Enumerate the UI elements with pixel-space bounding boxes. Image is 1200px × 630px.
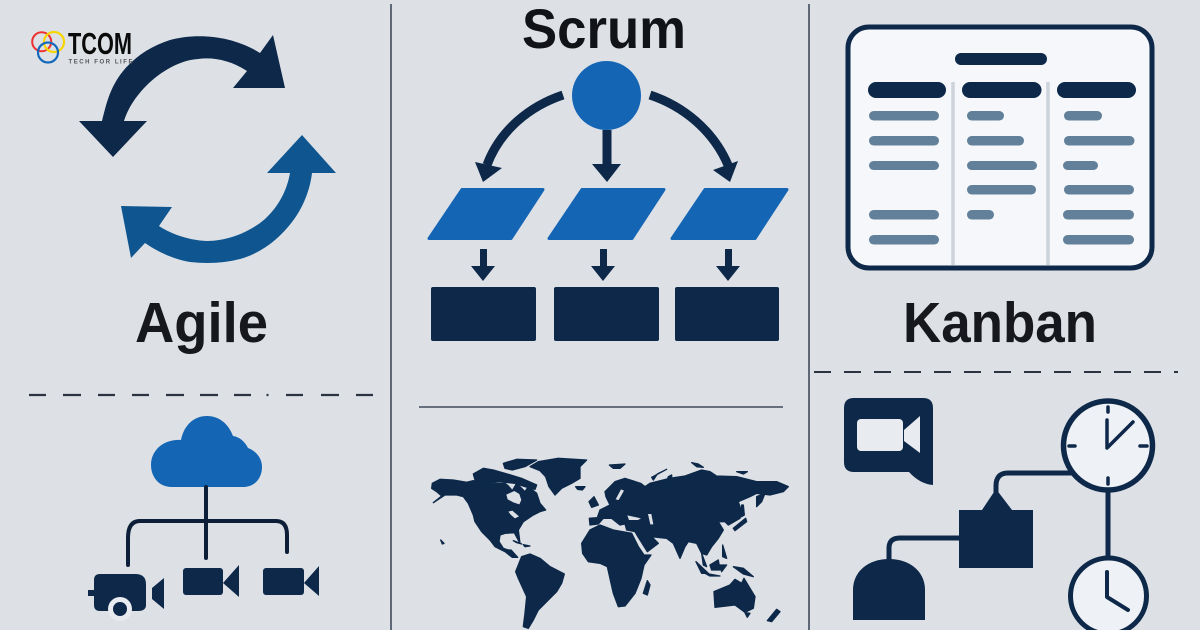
boxes (431, 287, 779, 341)
node: top circle (572, 61, 641, 130)
icon: blue cycle arrow (121, 135, 336, 263)
map: Europe Asia Africa Oceania (582, 463, 788, 622)
clock: bottom (1070, 558, 1146, 630)
diagram: workflow with clocks (853, 401, 1152, 630)
small arrows (471, 249, 740, 281)
camera 3 (263, 566, 319, 596)
column headers (868, 82, 1136, 98)
arrows: from circle to sprints (487, 95, 728, 166)
camera 2 (183, 565, 239, 597)
heading: Agile: Agile (135, 291, 268, 355)
chart: world map (432, 458, 788, 628)
logo: TCOM: TECH FOR LIFE (68, 60, 132, 66)
task bars (869, 111, 1134, 244)
camera 1 (88, 574, 164, 621)
icon: video chat bubble (844, 398, 933, 485)
board title bar (955, 53, 1047, 65)
heading: Kanban: Kanban (903, 291, 1097, 355)
map: Americas (432, 458, 587, 628)
parallelograms (429, 190, 787, 238)
icon: dark cycle arrow (79, 35, 285, 157)
shape: tagged square (959, 489, 1033, 568)
diagram: Scrum hierarchy (429, 61, 787, 341)
shape: dome (853, 559, 925, 620)
panel: Kanban board (848, 27, 1152, 268)
logo: TCOM: TCOM (68, 26, 132, 61)
clock: top (1064, 401, 1152, 490)
icon: cloud network with cameras (88, 416, 319, 621)
logo: TCOM (32, 26, 133, 66)
